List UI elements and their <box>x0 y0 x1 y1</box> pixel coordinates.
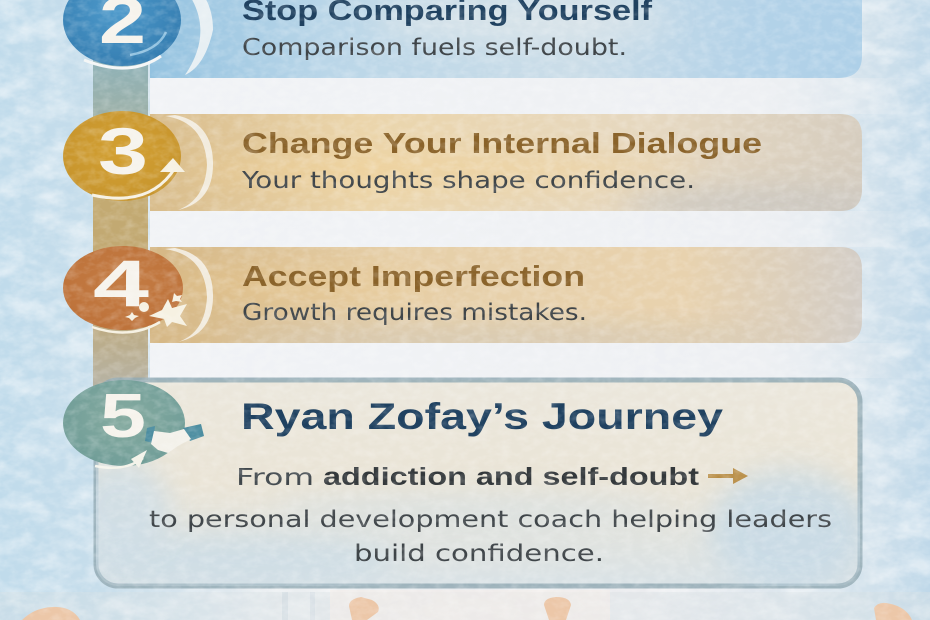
text: journey line 1: From <box>236 465 314 491</box>
icon: fist 4 <box>874 603 912 620</box>
crescent: step 3 <box>165 115 213 210</box>
panel: step 2 <box>63 0 862 78</box>
arrow <box>708 468 748 484</box>
icon: stars <box>149 299 187 327</box>
text: step 2: Comparison fuels self-doubt. <box>242 35 627 61</box>
wash: step 2 <box>370 0 670 44</box>
text: journey line 2: to personal development coach helping leaders <box>149 507 832 533</box>
heading: step 3: Change Your Internal Dialogue <box>242 128 762 160</box>
text: journey line 3: build confidence. <box>354 541 604 567</box>
badge: step 3 <box>63 111 185 201</box>
text: step 4: Growth requires mistakes. <box>242 300 587 326</box>
card: journey background <box>96 380 860 586</box>
panel: step 3 <box>63 111 862 211</box>
scene: raised fists at the bottom <box>0 590 930 620</box>
icon: fist 3 <box>544 597 571 620</box>
heading: journey: Ryan Zofay’s Journey <box>241 396 724 437</box>
wash: step 4 <box>243 325 714 343</box>
panel: Ryan Zofay's journey <box>60 380 870 590</box>
card: step 2 background <box>150 0 862 78</box>
card: step 4 background <box>150 247 862 343</box>
crescent: step 2 <box>185 0 213 75</box>
wash: step 3 <box>324 152 858 211</box>
card: step 3 background <box>150 114 862 211</box>
panel: step 4 <box>63 246 862 352</box>
heading: step 4: Accept Imperfection <box>242 261 585 293</box>
icon: handshake <box>145 424 204 453</box>
badge: step 4: 4 <box>93 246 149 320</box>
wash: journey <box>60 460 870 590</box>
text: step 3: Your thoughts shape confidence. <box>241 168 695 194</box>
timeline connector column <box>93 60 148 400</box>
badge: step 5 <box>63 380 204 468</box>
badge: step 3: 3 <box>98 114 148 188</box>
icon: fist 1 <box>22 607 80 620</box>
badge: step 4 <box>63 246 187 332</box>
text: journey line 1 <box>236 463 700 491</box>
crescent: step 4 <box>165 248 213 342</box>
icon: fist 2 <box>349 597 379 620</box>
badge: step 5: 5 <box>100 382 146 451</box>
badge: step 2 <box>63 0 181 68</box>
text: journey line 1: addiction and self-doubt <box>323 463 700 491</box>
